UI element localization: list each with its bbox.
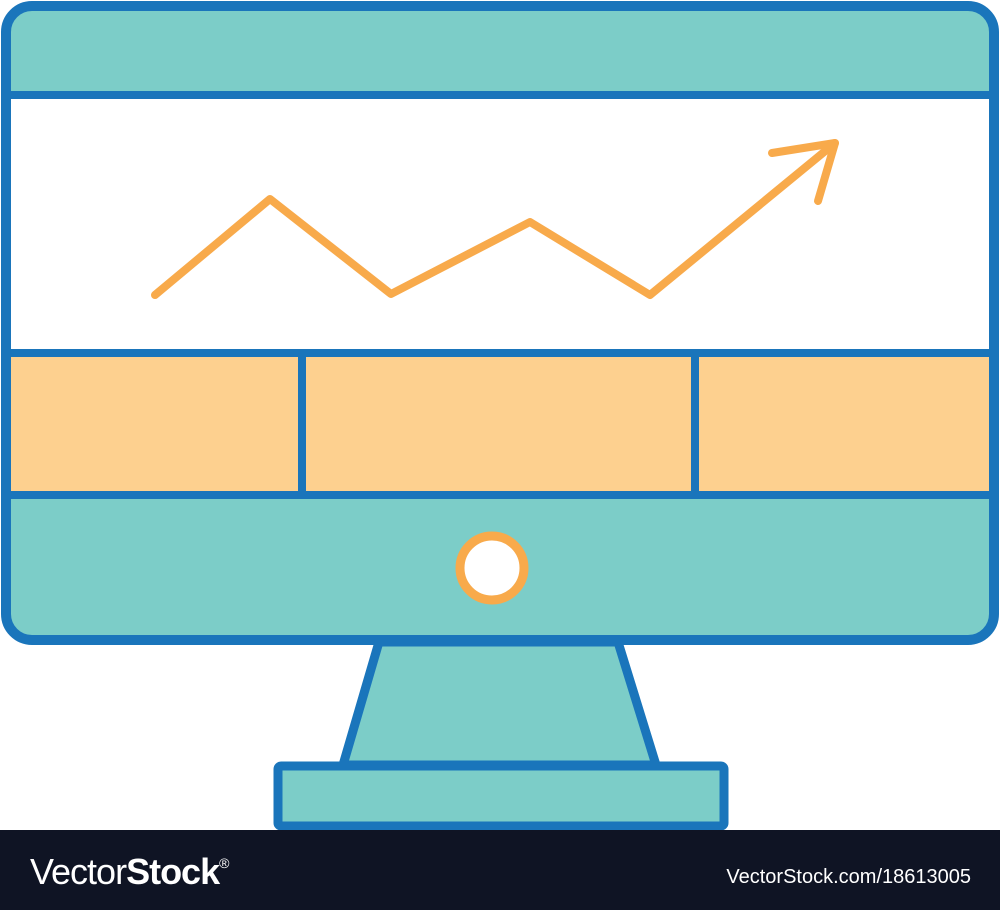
monitor screen [6, 6, 994, 640]
chart line with arrow [155, 143, 835, 295]
footer url: VectorStock.com/18613005 [726, 866, 971, 888]
monitor stand [278, 642, 724, 826]
power button [460, 536, 524, 600]
footer brand: ® [219, 855, 230, 871]
footer bar [0, 830, 1000, 910]
footer brand: VectorStock [30, 851, 219, 892]
